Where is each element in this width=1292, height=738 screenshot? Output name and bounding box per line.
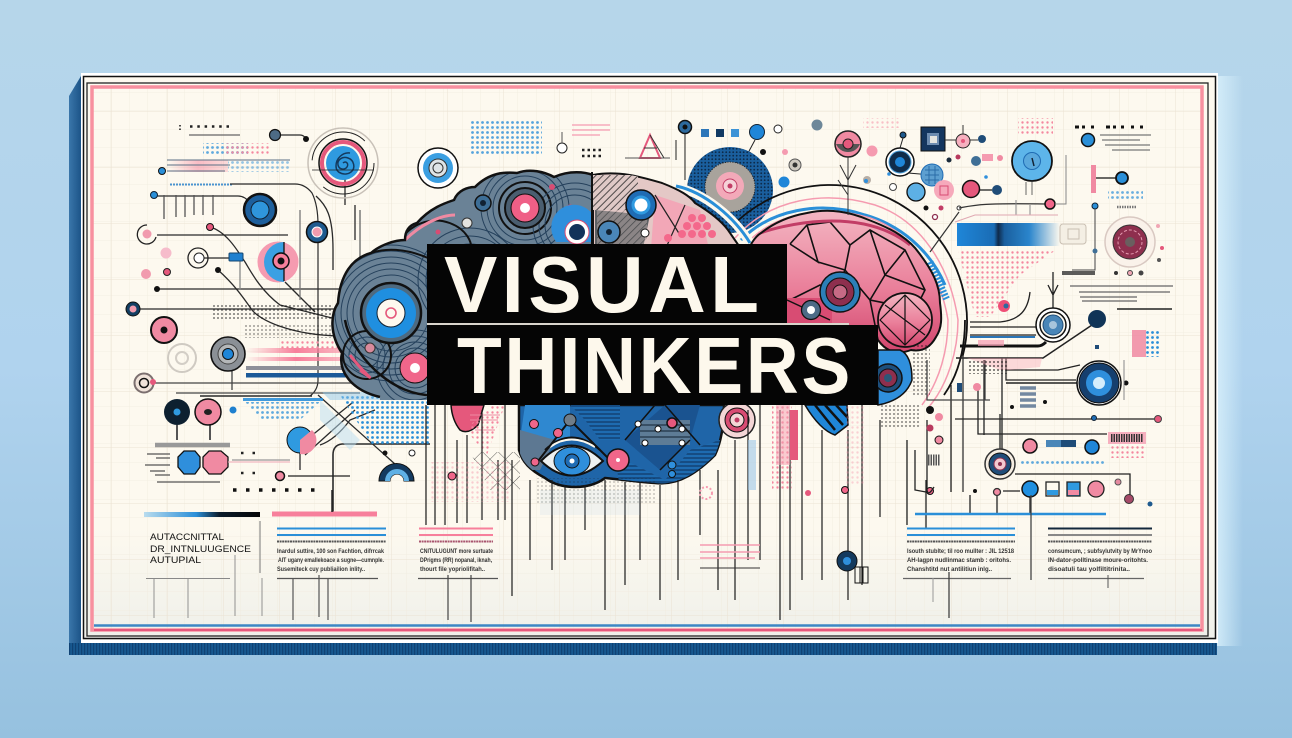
circuit lines: left bbox=[140, 135, 430, 512]
cross hatching and drip colours bbox=[430, 405, 934, 583]
text block: column 2: CNITULUGUNT more surtuate bbox=[420, 548, 493, 555]
icons: left cluster of nodes bbox=[126, 130, 415, 490]
poster board bbox=[69, 73, 1243, 655]
text block: column 1: Susemiteck cuy publiailion inlity.. bbox=[277, 566, 365, 573]
halftone: blue beneath left lobe bbox=[245, 392, 430, 450]
text block: column 2: DPrigms (RR) nopanal, iknah, bbox=[420, 557, 492, 564]
top right icons bbox=[835, 118, 1151, 270]
arcs around the right brain bbox=[636, 128, 1024, 516]
text block: column 1: AIT ugany emallekoace a sugne—cumnple. bbox=[278, 557, 384, 564]
lobes under the title bbox=[451, 345, 930, 455]
brain: left blue-grey lobe bbox=[331, 170, 594, 400]
text block: column 1: Inardul suttire, 100 son Fachtion, difrrcak bbox=[277, 548, 384, 555]
text block: column 3 bbox=[903, 528, 1015, 618]
coloured stripes: left of brain bbox=[212, 305, 366, 401]
text block: left heading: DR_INTNLUUGENCE bbox=[150, 544, 251, 555]
text block: column 4: disoatuli tau yolfiltitrinita.. bbox=[1048, 566, 1130, 573]
title: VISUAL THINKERS: THINKERS bbox=[457, 321, 853, 410]
halftone gradient blocks: upper left bbox=[167, 125, 290, 184]
icon: spiral target bbox=[308, 128, 378, 198]
text block: column 3: Chanshtitd nut antilitiun inlg.. bbox=[907, 566, 992, 573]
top strip icons bbox=[470, 120, 822, 188]
text block: left heading: AUTACCNITTAL bbox=[150, 532, 224, 543]
icon: microchip bbox=[1060, 224, 1086, 244]
title: VISUAL THINKERS bbox=[427, 240, 878, 410]
text block: column 2 bbox=[418, 528, 498, 622]
right circuits bbox=[907, 272, 1173, 528]
text block: column 4 bbox=[1031, 495, 1152, 588]
icon: halftone blue globe bbox=[687, 147, 773, 233]
text block: left heading: AUTUPIAL bbox=[150, 555, 201, 566]
blue gradient bar bbox=[957, 223, 1060, 246]
text block: column 3: Isouth stublte; til roo mullter : JIL 12518 bbox=[907, 548, 1014, 555]
text block: column 2: thourt file yopriolifitah.. bbox=[420, 566, 485, 573]
right detail pieces bbox=[915, 308, 1162, 514]
icon: dial bbox=[1062, 207, 1164, 276]
text block: column 3: AH-lagpn nudlinmac stamb : oritohs. bbox=[907, 557, 1011, 564]
text block: left heading bbox=[144, 512, 262, 618]
text block: column 4: consumcum, ; subfsylutvity by MrYnoo bbox=[1048, 548, 1152, 555]
text block: column 1 bbox=[272, 490, 386, 620]
brain: middle patterned lobe bbox=[593, 172, 739, 244]
icon: blue concentric circle bbox=[418, 148, 458, 188]
text block: column 4: IN-dator-polltinase moure-oritohts. bbox=[1048, 557, 1148, 564]
drip lines under brain bbox=[426, 405, 880, 620]
brain: right pink lobe bbox=[745, 211, 941, 352]
title: VISUAL THINKERS: VISUAL bbox=[444, 240, 759, 329]
brain: lower blue lobe with eye bbox=[519, 405, 724, 490]
pink halftone block bbox=[958, 250, 1056, 317]
